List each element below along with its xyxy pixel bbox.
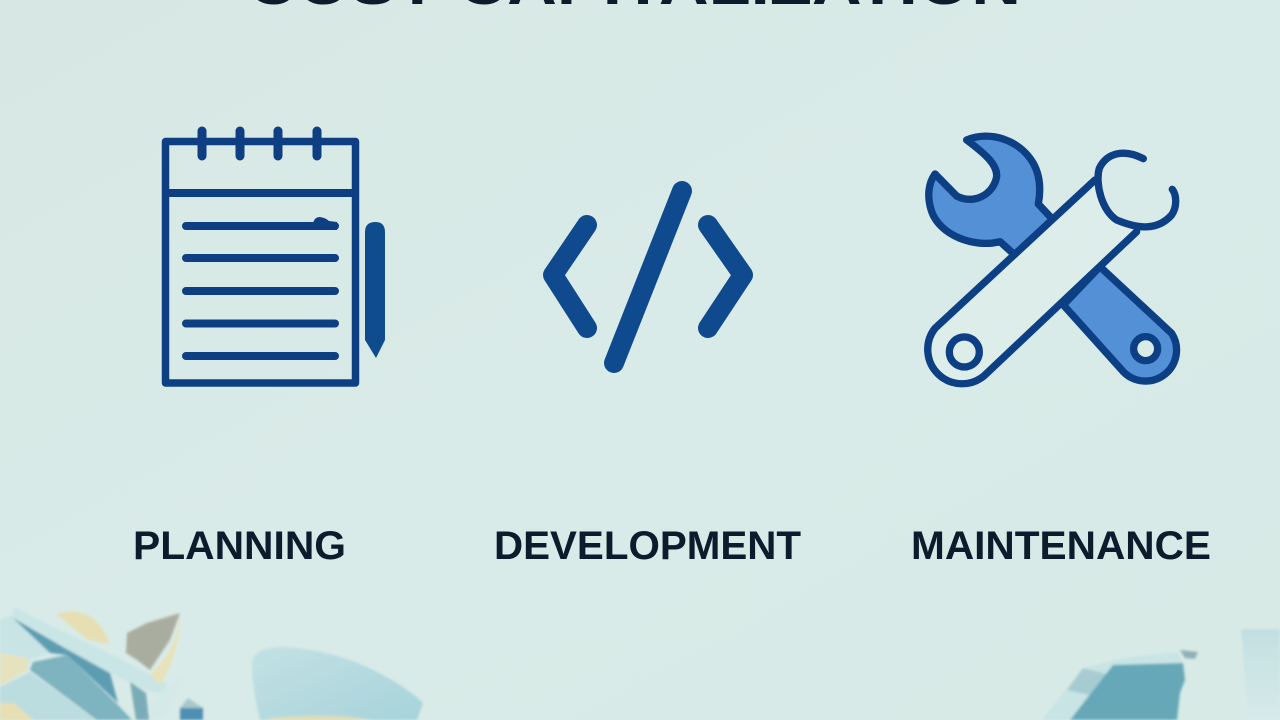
icon: code brackets: [553, 191, 743, 363]
icon: notebook and pencil: [166, 131, 385, 383]
label: maintenance: MAINTENANCE: [911, 524, 1211, 568]
label: planning: PLANNING: [133, 524, 346, 568]
decoration: bottom-left paper shapes: [0, 607, 423, 720]
label: development: DEVELOPMENT: [494, 524, 801, 568]
icon: crossed wrenches: [928, 136, 1177, 384]
decoration: bottom-right paper shapes: [1042, 629, 1280, 720]
